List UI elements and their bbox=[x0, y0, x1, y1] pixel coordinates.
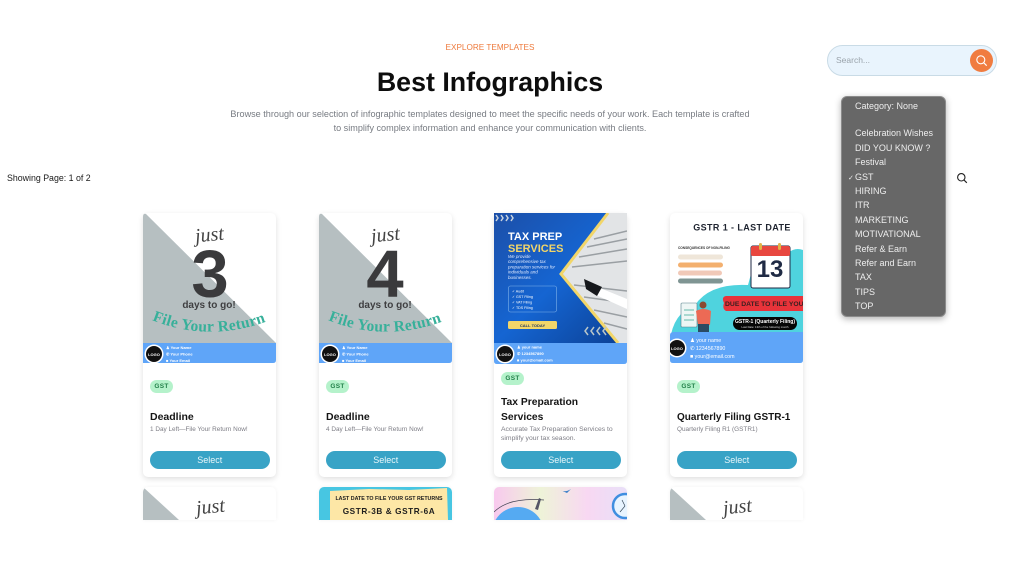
thumbnail: 3 days to go: 3 bbox=[191, 237, 229, 312]
thumbnail: 4 days to go bbox=[319, 214, 452, 363]
panel: second row card just bbox=[143, 487, 276, 520]
thumbnail: pastel illustration partial bbox=[494, 487, 627, 520]
thumbnail contact strip bbox=[494, 343, 627, 364]
panel: template card tax preparation bbox=[494, 213, 627, 477]
thumbnail: just partial: just bbox=[192, 495, 226, 520]
panel: template card deadline 4 days bbox=[319, 213, 452, 477]
card title: Deadline bbox=[326, 411, 370, 423]
thumbnail: tax prep services: SERVICES bbox=[508, 243, 563, 255]
thumbnail: tax prep services: individuals and bbox=[508, 270, 538, 274]
thumbnail: 3 days to go: ♟ Your Name bbox=[166, 345, 192, 350]
thumbnail: tax prep services: ✓ VAT Filing bbox=[512, 300, 532, 304]
thumbnail contact strip: ✆ 1234567890 bbox=[517, 351, 544, 356]
thumbnail: last date GST returns partial bbox=[330, 488, 448, 520]
thumbnail: tax prep services: We provide bbox=[508, 254, 531, 259]
thumbnail: GSTR 1 last date: 13 bbox=[757, 256, 783, 283]
card title: Deadline bbox=[150, 411, 194, 423]
card title: Tax Preparation bbox=[501, 397, 578, 408]
thumbnail: tax prep services: ✓ TDS Filing bbox=[512, 306, 533, 310]
thumbnail contact strip: ♟ your name bbox=[517, 344, 543, 350]
search box bbox=[827, 45, 997, 76]
select button bbox=[150, 451, 270, 469]
thumbnail: 3 days to go: LOGO bbox=[148, 352, 160, 357]
menu item: celebration wishes: Celebration Wishes bbox=[855, 128, 933, 138]
thumbnail: GSTR 1 last date: CONSEQUENCES OF NON-FILING bbox=[678, 246, 730, 250]
thumbnail: tax prep services: ✓ Audit bbox=[512, 290, 524, 294]
thumbnail: 3 days to go: just bbox=[191, 223, 225, 248]
card description: Quarterly Filing R1 (GSTR1) bbox=[677, 426, 758, 433]
thumbnail: tax prep services: preparation services for bbox=[507, 264, 556, 270]
select button bbox=[326, 451, 446, 469]
card title: Quarterly Filing GSTR-1 bbox=[677, 412, 790, 423]
tag: GST bbox=[681, 383, 696, 390]
tag bbox=[677, 380, 700, 393]
tag bbox=[150, 380, 173, 393]
thumbnail: GSTR 1 last date: ♟ your name bbox=[690, 338, 721, 344]
title: Best Infographics bbox=[377, 67, 603, 97]
thumbnail: tax prep services: comprehensive tax bbox=[508, 259, 547, 264]
thumbnail: 3 days to go bbox=[143, 214, 276, 363]
thumbnail: tax prep services: businesses. bbox=[508, 275, 532, 280]
search placeholder: Search... bbox=[836, 55, 870, 65]
panel: template card quarterly filing bbox=[670, 213, 803, 477]
thumbnail: just partial right: just bbox=[719, 495, 753, 520]
menu item: ITR: ITR bbox=[855, 200, 870, 210]
thumbnail: GSTR 1 last date bbox=[670, 222, 803, 363]
intro text: to simplify complex information and enhance your communication with clients. bbox=[334, 122, 646, 132]
select button: Select bbox=[373, 455, 398, 465]
page indicator: Showing Page: 1 of 2 bbox=[7, 173, 91, 183]
card description bbox=[501, 426, 613, 442]
select button: Select bbox=[197, 455, 222, 465]
tag: GST bbox=[330, 383, 345, 390]
select button: Select bbox=[548, 455, 573, 465]
thumbnail: 4 days to go: ✆ Your Phone bbox=[342, 352, 369, 356]
tag bbox=[326, 380, 349, 393]
thumbnail: last date GST returns partial: LAST DATE TO FILE YOUR GST RETURNS bbox=[335, 496, 443, 502]
icon: magnifier bbox=[957, 173, 968, 184]
menu item: hiring: HIRING bbox=[855, 186, 886, 196]
card title: Services bbox=[501, 412, 543, 423]
menu item: tax: TAX bbox=[855, 272, 872, 282]
thumbnail contact strip: ■ your@email.com bbox=[517, 358, 553, 362]
thumbnail: 3 days to go: ■ Your Email bbox=[166, 358, 190, 363]
menu item: GST selected: ✓ bbox=[848, 175, 854, 182]
thumbnail: GSTR 1 last date: ■ your@email.com bbox=[690, 354, 735, 360]
select button bbox=[677, 451, 796, 469]
menu item: top: TOP bbox=[855, 301, 873, 311]
intro text bbox=[230, 109, 750, 133]
thumbnail: GSTR 1 last date: Last Date: 13th of the following month bbox=[742, 325, 789, 329]
thumbnail: 4 days to go: just bbox=[367, 223, 401, 248]
thumbnail: tax prep services: ✓ GST Filing bbox=[512, 295, 533, 299]
card description: simplify your tax season. bbox=[501, 435, 575, 442]
thumbnail: 4 days to go: ♟ Your Name bbox=[342, 345, 368, 350]
menu item: festival: Festival bbox=[855, 157, 886, 167]
panel: second row card just right bbox=[670, 487, 803, 520]
panel: second row card GST returns bbox=[319, 487, 452, 520]
thumbnail: 4 days to go: File Your Return bbox=[328, 310, 442, 332]
tag bbox=[501, 372, 524, 385]
menu item: refer and earn: Refer and Earn bbox=[855, 258, 916, 268]
thumbnail: 3 days to go: File Your Return bbox=[152, 310, 266, 332]
thumbnail: 4 days to go: LOGO bbox=[324, 352, 336, 357]
menu item: tips: TIPS bbox=[855, 287, 875, 297]
thumbnail: 4 days to go: days to go! bbox=[358, 300, 412, 311]
eyebrow: explore templates: EXPLORE TEMPLATES bbox=[446, 43, 534, 52]
thumbnail contact strip: LOGO bbox=[499, 352, 511, 357]
menu item: category none: Category: None bbox=[855, 101, 918, 111]
panel: template card deadline 3 days bbox=[143, 213, 276, 477]
thumbnail: tax prep services bbox=[494, 213, 627, 343]
thumbnail: tax prep services: CALL TODAY bbox=[520, 323, 545, 328]
thumbnail: just partial right bbox=[670, 488, 753, 520]
thumbnail: last date GST returns partial: GSTR-3B & GSTR-6A bbox=[343, 507, 435, 516]
category dropdown menu bbox=[841, 96, 946, 317]
thumbnail: 3 days to go: ✆ Your Phone bbox=[166, 352, 193, 356]
intro text: Browse through our selection of infographic templates designed to meet the specific needs of your work. Each template is crafted bbox=[230, 109, 750, 119]
thumbnail: 4 days to go: ■ Your Email bbox=[342, 358, 366, 363]
thumbnail: GSTR 1 last date: LOGO bbox=[671, 346, 683, 351]
card description: 4 Day Left—File Your Return Now! bbox=[326, 426, 424, 433]
thumbnail: tax prep services: TAX PREP bbox=[508, 231, 562, 243]
menu item: refer & earn: Refer & Earn bbox=[855, 244, 907, 254]
thumbnail: 4 days to go: 4 bbox=[366, 237, 404, 312]
thumbnail: just partial bbox=[143, 488, 226, 520]
tag: GST bbox=[154, 383, 169, 390]
menu item: marketing: MARKETING bbox=[855, 215, 909, 225]
thumbnail: GSTR 1 last date: GSTR-1 (Quarterly Filing) bbox=[735, 319, 795, 325]
select button bbox=[501, 451, 620, 469]
card description: Accurate Tax Preparation Services to bbox=[501, 426, 613, 433]
search button icon bbox=[970, 49, 993, 72]
tag: GST bbox=[505, 375, 520, 382]
card title bbox=[501, 397, 578, 423]
thumbnail: GSTR 1 last date: GSTR 1 - LAST DATE bbox=[693, 222, 791, 232]
card description: 1 Day Left—File Your Return Now! bbox=[150, 426, 248, 433]
menu item: motivational: MOTIVATIONAL bbox=[855, 229, 921, 239]
menu item: did you know: DID YOU KNOW ? bbox=[855, 143, 930, 153]
menu item: GST selected: GST bbox=[855, 172, 874, 182]
thumbnail: GSTR 1 last date: ✆ 1234567890 bbox=[690, 346, 725, 352]
thumbnail: 3 days to go: days to go! bbox=[182, 300, 236, 311]
panel: second row card clock bbox=[494, 487, 627, 520]
select button: Select bbox=[724, 455, 749, 465]
